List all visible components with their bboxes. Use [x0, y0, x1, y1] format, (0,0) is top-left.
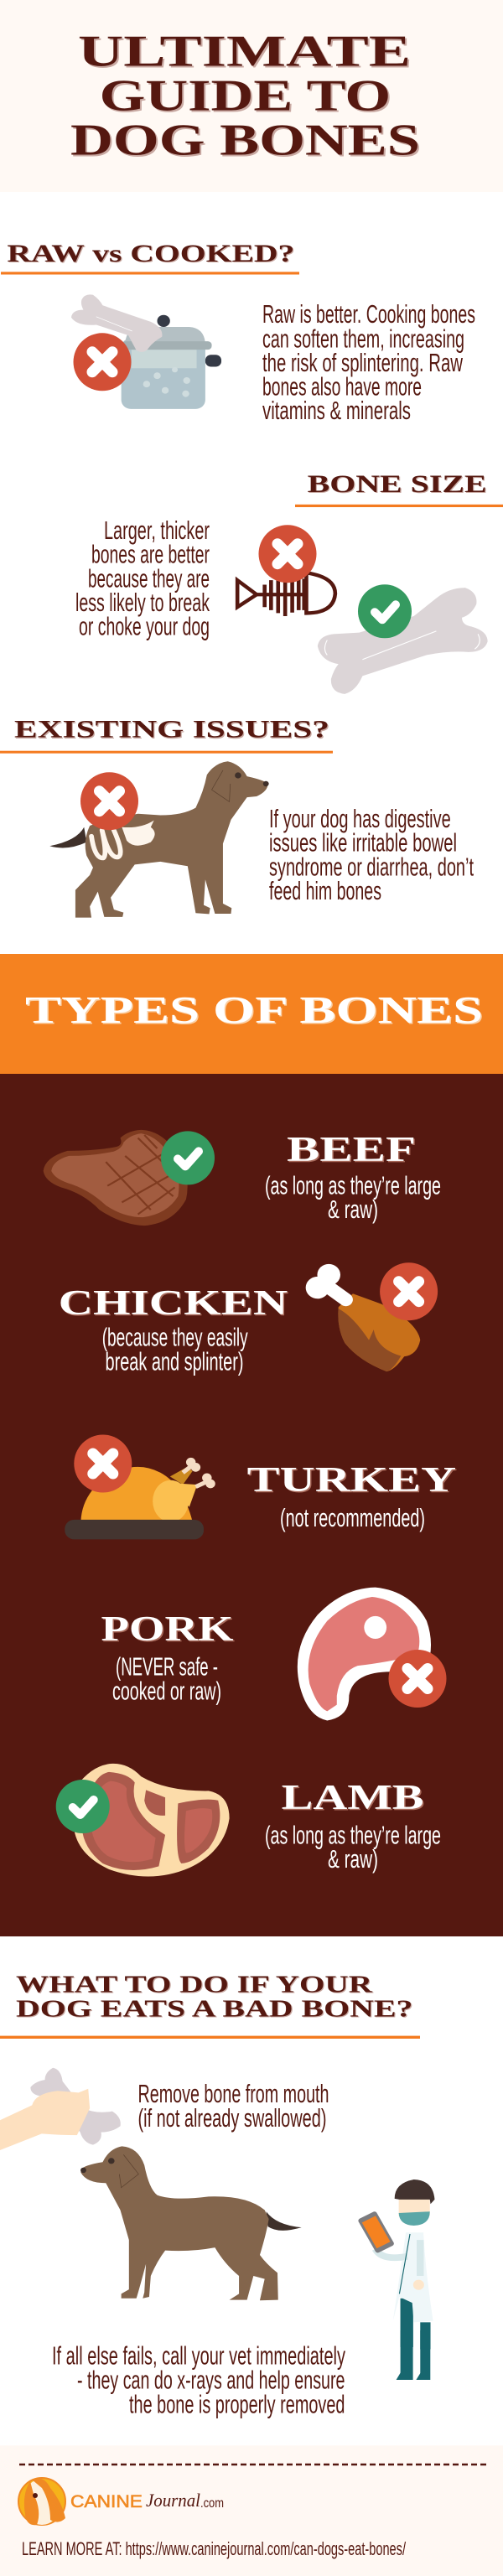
- panel: types of bones banner: [0, 954, 503, 1074]
- heading: turkey: TURKEY: [248, 1462, 458, 1501]
- text: call your vet: - they can do x-rays and help ensure: [77, 2365, 345, 2394]
- title: GUIDE TO: [101, 73, 392, 122]
- icon: pork cut: [298, 1588, 431, 1720]
- icon: green check badge: [358, 584, 412, 638]
- logo text: [70, 2490, 224, 2511]
- text: raw is better: vitamins & minerals: [262, 396, 411, 425]
- heading: existing issues: EXISTING ISSUES?: [15, 717, 330, 744]
- heading: what to do: WHAT TO DO IF YOUR: [16, 1971, 373, 1998]
- icon: hand holding bone: [0, 2068, 121, 2150]
- title: ULTIMATE: [78, 28, 411, 76]
- icon: dog with intestines: [49, 761, 269, 918]
- heading: beef: BEEF: [288, 1132, 417, 1170]
- text: larger thicker bones: or choke your dog: [79, 612, 210, 640]
- heading: raw vs cooked: [1, 240, 299, 275]
- text: chicken note: break and splinter): [106, 1346, 243, 1376]
- heading: beef: BEEF: [287, 1131, 416, 1169]
- text: raw is better: [262, 299, 475, 425]
- panel: footer: [0, 2445, 503, 2576]
- heading: bone size: [295, 470, 503, 507]
- panel: title band: [0, 0, 503, 192]
- heading: turkey: TURKEY: [247, 1461, 456, 1500]
- text: chicken note: [102, 1323, 248, 1376]
- item: pork: [101, 1588, 446, 1720]
- text: digestive issues: feed him bones: [269, 876, 381, 905]
- text: larger thicker bones: Larger, thicker: [104, 516, 210, 545]
- text: pork note: (NEVER safe -: [116, 1652, 218, 1682]
- heading: chicken: CHICKEN: [60, 1286, 289, 1324]
- heading: raw vs cooked: RAW vs COOKED?: [7, 240, 294, 267]
- panel: existing issues: [0, 716, 474, 918]
- item: beef: [44, 1130, 441, 1226]
- icon: canine journal logo: [18, 2478, 65, 2525]
- heading: what to do: DOG EATS A BAD BONE?: [16, 1995, 413, 2022]
- logo text: .com: [200, 2496, 224, 2511]
- item: turkey: [65, 1435, 458, 1539]
- heading: raw vs cooked: RAW vs COOKED?: [8, 241, 296, 268]
- heading: existing issues: [0, 716, 333, 754]
- title: DOG BONES: [70, 117, 420, 165]
- heading: pork: PORK: [102, 1611, 235, 1650]
- icon: steak: [44, 1130, 188, 1226]
- item: lamb: [56, 1764, 441, 1876]
- icon: red x badge: [80, 772, 138, 830]
- heading: what to do: WHAT TO DO IF YOUR: [17, 1972, 375, 1999]
- logo text: CANINE: [70, 2492, 143, 2511]
- text: call your vet: [52, 2341, 345, 2418]
- heading: bone size: BONE SIZE: [309, 471, 488, 499]
- text: remove bone: (if not already swallowed): [137, 2103, 327, 2133]
- heading: lamb: LAMB: [283, 1780, 425, 1818]
- text: remove bone: Remove bone from mouth: [137, 2079, 329, 2108]
- heading: types of bones: [25, 988, 485, 1033]
- icon: red x badge: [258, 525, 317, 583]
- text: digestive issues: [269, 804, 474, 905]
- panel: bone size: [75, 470, 503, 694]
- title: DOG BONES: [72, 117, 422, 166]
- icon: vet with phone: [357, 2179, 434, 2349]
- text: call your vet: the bone is properly removed: [129, 2389, 345, 2418]
- icon: pot with bone: [71, 294, 221, 409]
- text: beef note: & raw): [328, 1195, 378, 1224]
- heading: chicken: CHICKEN: [59, 1284, 288, 1323]
- text: beef note: [265, 1170, 441, 1224]
- panel: raw vs cooked: [1, 240, 475, 425]
- icon: red x badge: [74, 1435, 132, 1492]
- title: ULTIMATE: [80, 29, 412, 77]
- heading: turkey: [247, 1461, 458, 1501]
- text: turkey note: (not recommended): [280, 1503, 425, 1532]
- text: larger thicker bones: because they are: [88, 563, 210, 593]
- text: larger thicker bones: less likely to break: [75, 588, 210, 617]
- icon: green check badge: [161, 1131, 215, 1184]
- heading: lamb: LAMB: [282, 1779, 424, 1817]
- text: lamb note: & raw): [328, 1844, 378, 1874]
- text: pork note: cooked or raw): [112, 1677, 221, 1705]
- heading: pork: PORK: [101, 1610, 234, 1649]
- text: remove bone: [137, 2079, 329, 2133]
- icon: brown dog: [80, 2146, 302, 2300]
- text: larger thicker bones: [75, 516, 210, 640]
- icon: red x badge: [389, 1650, 446, 1708]
- icon: large bone: [318, 588, 488, 694]
- text: larger thicker bones: bones are better: [91, 539, 210, 568]
- icon: roast turkey: [65, 1458, 215, 1539]
- icon: chicken drumstick: [306, 1264, 420, 1371]
- icon: fish bone: [237, 573, 335, 616]
- logo text: Journal: [146, 2490, 200, 2511]
- title: [70, 28, 422, 166]
- icon: red x badge: [380, 1262, 438, 1320]
- heading: what to do: DOG EATS A BAD BONE?: [17, 1997, 414, 2024]
- heading: types of bones: TYPES OF BONES: [25, 988, 483, 1031]
- text: lamb note: [265, 1821, 441, 1874]
- text: call your vet: If all else fails, call your vet immediately: [52, 2341, 345, 2371]
- icon: red x badge: [74, 333, 131, 391]
- title: GUIDE TO: [100, 71, 391, 120]
- heading: existing issues: EXISTING ISSUES?: [14, 716, 329, 744]
- heading: what to do: [0, 1971, 420, 2039]
- heading: beef: [287, 1131, 417, 1170]
- panel: what to do: [0, 1971, 434, 2418]
- icon: green check badge: [56, 1780, 110, 1833]
- panel: types of bones list: [0, 1074, 503, 1936]
- item: chicken: [59, 1262, 438, 1376]
- icon: lamb chop: [74, 1764, 230, 1876]
- icon: vet legs: [397, 2330, 430, 2380]
- heading: bone size: BONE SIZE: [308, 470, 487, 498]
- heading: types of bones: TYPES OF BONES: [27, 989, 485, 1033]
- text: pork note: [112, 1652, 221, 1705]
- text: chicken note: (because they easily: [102, 1323, 248, 1352]
